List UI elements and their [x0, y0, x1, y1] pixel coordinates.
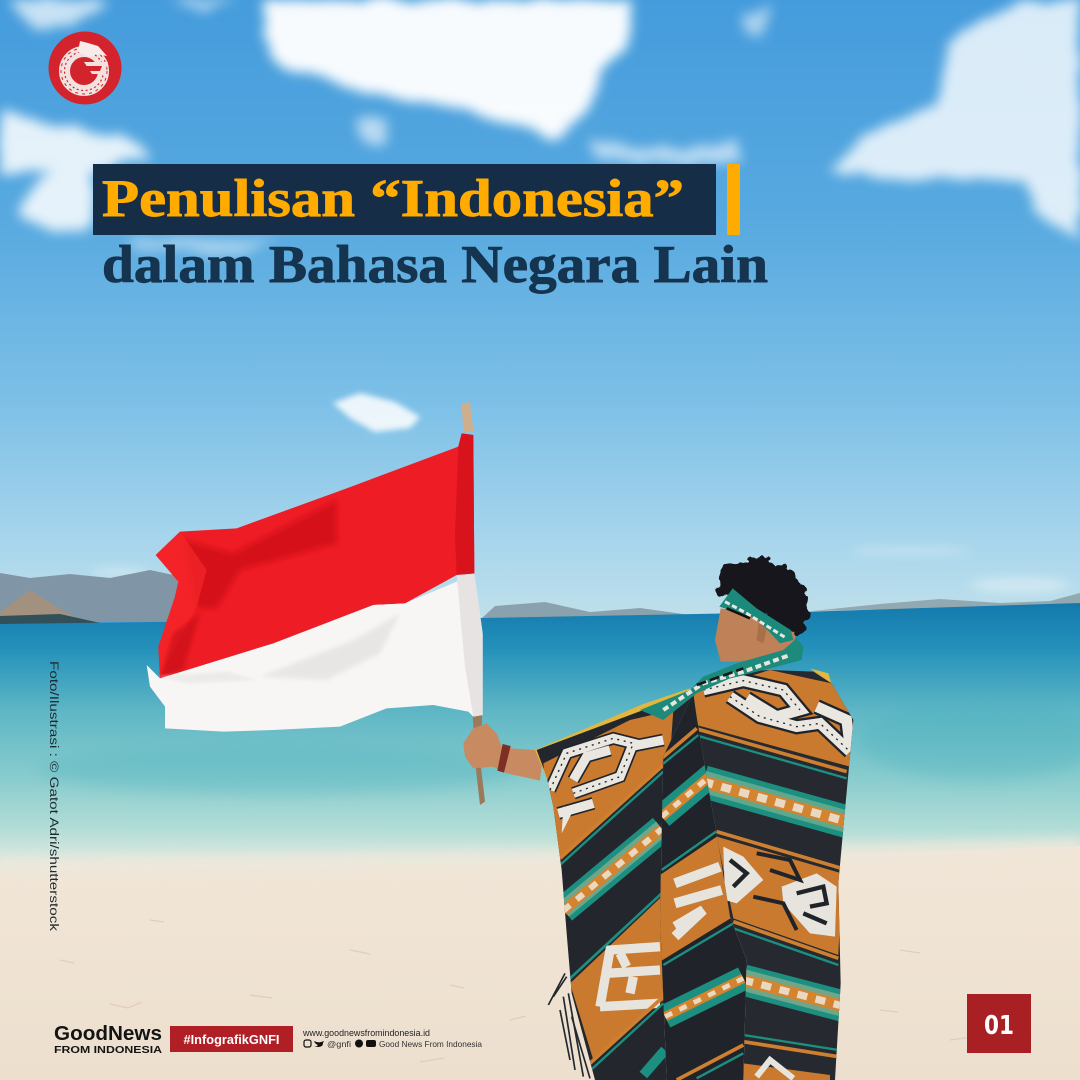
- headband: [719, 588, 793, 643]
- footer brand: [54, 1023, 482, 1056]
- title line 1 highlight bar: [93, 164, 716, 235]
- clouds: [0, 0, 1080, 252]
- flag with pole and hand: [147, 402, 543, 805]
- social icons and handles: Good News From Indonesia: [379, 1039, 482, 1049]
- page number badge: [967, 994, 1031, 1053]
- lower motif: [717, 837, 842, 955]
- background: sand: [0, 846, 1080, 1080]
- bracelet: [497, 744, 511, 773]
- upper motif: [543, 710, 673, 857]
- middle stripe band: [563, 828, 662, 910]
- logo badge: [48, 32, 122, 104]
- lower motif: [570, 897, 663, 1060]
- accent bar: [727, 164, 740, 235]
- page number badge: 01: [984, 1011, 1014, 1041]
- scarf: [640, 638, 803, 720]
- flag red stripe: [156, 433, 474, 678]
- social icons and handles: @gnfi: [327, 1039, 351, 1049]
- top motif: [693, 670, 855, 767]
- neck and face: [715, 608, 797, 662]
- brand subline: FROM INDONESIA: [54, 1044, 162, 1056]
- website: www.goodnewsfromindonesia.id: [302, 1028, 430, 1038]
- background: sky: [0, 0, 1080, 620]
- hand and arm: [463, 723, 543, 781]
- brand wordmark: GoodNews: [54, 1023, 162, 1045]
- photo credit: Foto/Ilustrasi : © Gatot Adri/shutterstock: [47, 661, 59, 931]
- flag white stripe: [147, 574, 483, 732]
- poncho: [535, 668, 857, 1080]
- title: [93, 164, 768, 294]
- hair: [718, 556, 810, 635]
- small cloud above flag: [333, 393, 420, 432]
- hashtag tag: [170, 1026, 293, 1052]
- footer brand: #InfografikGNFI: [184, 1033, 280, 1047]
- person: [535, 556, 857, 1080]
- yellow collar trim: [535, 688, 695, 778]
- poncho centre panel: [657, 693, 750, 1080]
- background: sea: [0, 603, 1080, 876]
- middle stripe band: [703, 782, 847, 822]
- bottom motif: [743, 1035, 838, 1050]
- social icons and handles: [304, 1039, 482, 1049]
- fringe: [548, 973, 590, 1078]
- title line 1: Penulisan “Indonesia”: [102, 170, 684, 228]
- poncho left panel: [537, 693, 697, 1080]
- lower stripe band: [743, 980, 845, 1007]
- distant islands: [0, 570, 1080, 625]
- title line 2: dalam Bahasa Negara Lain: [102, 236, 768, 294]
- poncho right panel: [690, 668, 857, 1080]
- flag pole: [462, 402, 473, 432]
